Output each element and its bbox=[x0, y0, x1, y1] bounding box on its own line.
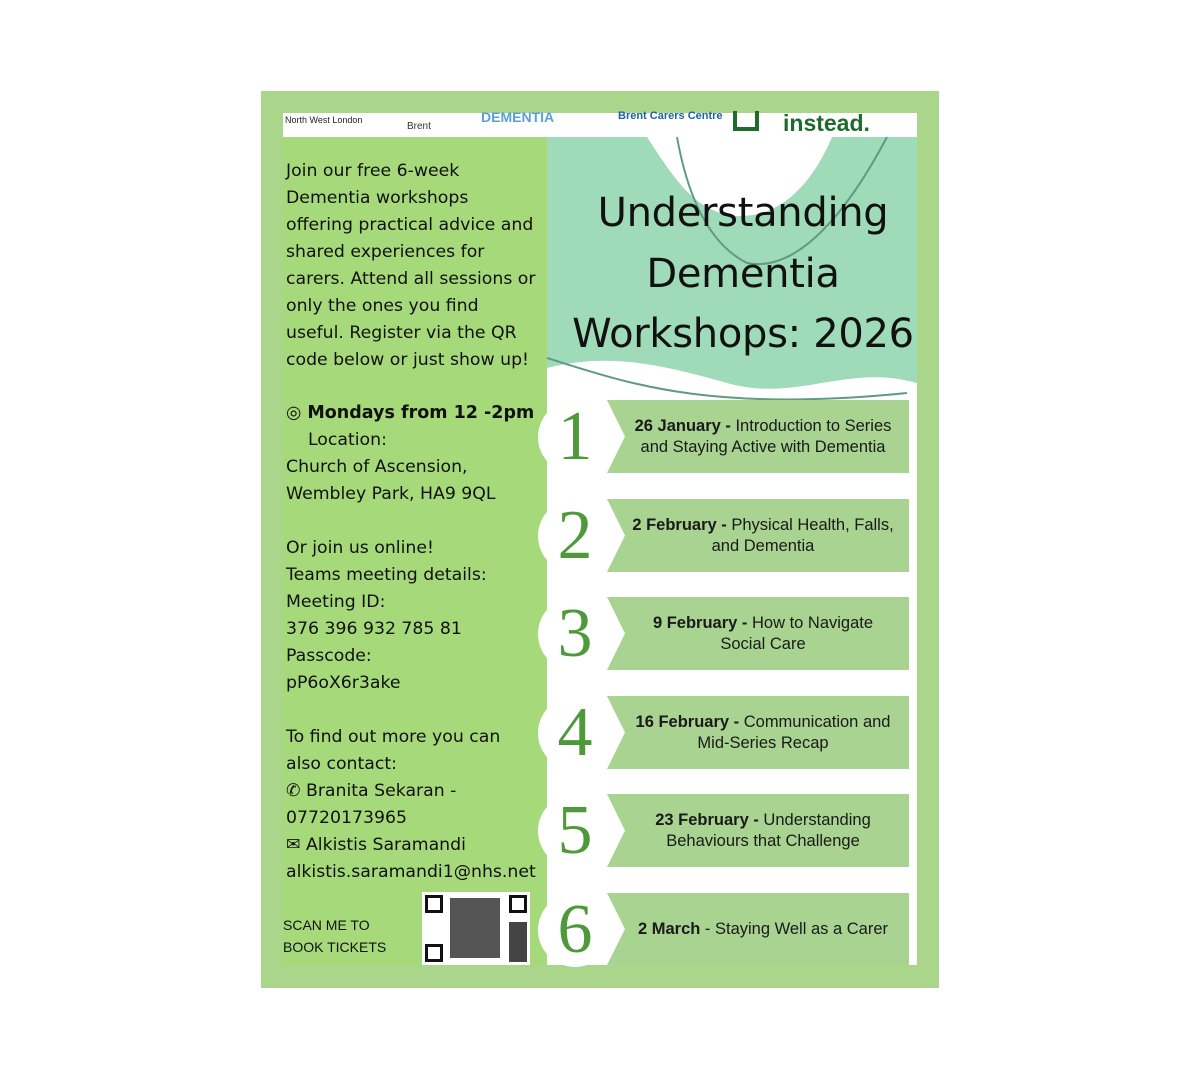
session 4: 16 February - Communication and bbox=[636, 712, 890, 730]
scan text: SCAN ME TO bbox=[283, 917, 370, 933]
location: Wembley Park, HA9 9QL bbox=[286, 484, 496, 504]
session 1: 26 January - Introduction to Series bbox=[635, 416, 891, 434]
number 5: 5 bbox=[558, 792, 592, 869]
session 6: 2 March - Staying Well as a Carer bbox=[638, 920, 888, 938]
session 3 bbox=[607, 597, 909, 670]
title: Dementia bbox=[646, 250, 840, 296]
session 5 bbox=[607, 794, 909, 867]
logo strip: Brent Carers Centre bbox=[618, 110, 723, 122]
intro text bbox=[285, 161, 536, 370]
online details: Or join us online! bbox=[286, 538, 434, 558]
online details: Meeting ID: bbox=[286, 592, 385, 612]
contacts: also contact: bbox=[286, 754, 397, 774]
number 6: 6 bbox=[558, 891, 592, 968]
contacts: ✆ Branita Sekaran - bbox=[286, 781, 456, 801]
intro text: code below or just show up! bbox=[286, 350, 529, 370]
number 4: 4 bbox=[558, 694, 592, 771]
number 4 bbox=[538, 696, 612, 770]
title: Understanding bbox=[598, 190, 888, 236]
number 1: 1 bbox=[558, 398, 592, 475]
number 6 bbox=[538, 893, 612, 967]
title: Workshops: 2026 bbox=[572, 311, 914, 357]
logo strip bbox=[283, 113, 878, 137]
number 2 bbox=[538, 499, 612, 573]
poster frame bbox=[261, 91, 939, 988]
number 2: 2 bbox=[558, 497, 592, 574]
session 3: Social Care bbox=[720, 634, 806, 652]
logo strip: instead. bbox=[783, 110, 870, 136]
session 1 bbox=[607, 400, 909, 473]
session 4 bbox=[607, 696, 909, 769]
intro text: carers. Attend all sessions or bbox=[286, 269, 536, 289]
contacts: To find out more you can bbox=[286, 727, 500, 747]
scan text: BOOK TICKETS bbox=[283, 939, 386, 955]
contacts: ✉ Alkistis Saramandi bbox=[286, 835, 466, 855]
number 3: 3 bbox=[558, 595, 592, 672]
intro text: useful. Register via the QR bbox=[286, 323, 517, 343]
QR code bbox=[422, 892, 530, 965]
intro text: only the ones you find bbox=[286, 296, 479, 316]
number 5 bbox=[538, 794, 612, 868]
online details: Passcode: bbox=[286, 646, 372, 666]
online details: Teams meeting details: bbox=[286, 565, 487, 585]
session 4: Mid-Series Recap bbox=[697, 734, 829, 752]
mint decorative shape bbox=[547, 136, 917, 400]
logo strip: North West London bbox=[285, 115, 362, 125]
title bbox=[572, 190, 914, 357]
intro text: shared experiences for bbox=[286, 242, 484, 262]
session 2: and Dementia bbox=[712, 536, 814, 554]
session 1: and Staying Active with Dementia bbox=[641, 438, 885, 456]
location: ◎ Mondays from 12 -2pm bbox=[286, 403, 534, 423]
intro text: Dementia workshops bbox=[286, 188, 468, 208]
online details: 376 396 932 785 81 bbox=[286, 619, 462, 639]
logo strip: Brent bbox=[407, 121, 431, 132]
contacts bbox=[286, 727, 536, 882]
number 3 bbox=[538, 597, 612, 671]
number 1 bbox=[538, 400, 612, 474]
session 5: Behaviours that Challenge bbox=[666, 832, 860, 850]
online details: pP6oX6r3ake bbox=[286, 673, 401, 693]
location bbox=[286, 403, 534, 504]
logo strip: DEMENTIA bbox=[481, 109, 554, 125]
session 2 bbox=[607, 499, 909, 572]
scan text bbox=[283, 917, 386, 955]
contacts: alkistis.saramandi1@nhs.net bbox=[286, 862, 536, 882]
left column bbox=[283, 113, 547, 965]
location: Church of Ascension, bbox=[286, 457, 468, 477]
session 5: 23 February - Understanding bbox=[655, 810, 871, 828]
location: Location: bbox=[308, 430, 387, 450]
online details bbox=[286, 538, 487, 693]
session 6 bbox=[607, 893, 909, 965]
intro text: offering practical advice and bbox=[286, 215, 533, 235]
right column bbox=[547, 113, 917, 965]
contacts: 07720173965 bbox=[286, 808, 407, 828]
session 3: 9 February - How to Navigate bbox=[653, 614, 873, 632]
session 2: 2 February - Physical Health, Falls, bbox=[632, 516, 894, 534]
intro text: Join our free 6-week bbox=[286, 161, 459, 181]
